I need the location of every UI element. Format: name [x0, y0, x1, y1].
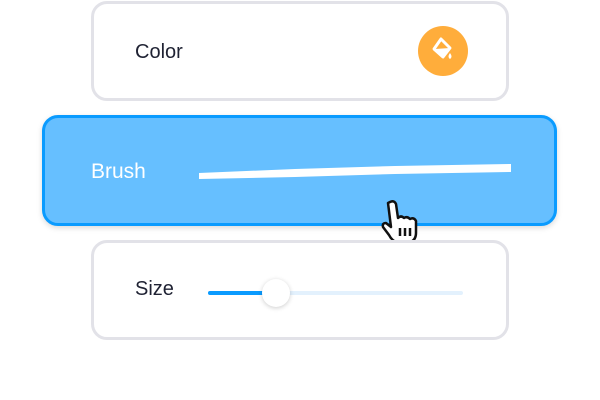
slider — [208, 278, 463, 310]
icon: hand cursor — [382, 200, 418, 240]
brush stroke — [199, 164, 511, 179]
label: Brush: Brush — [91, 160, 146, 183]
label: Color: Color — [135, 41, 183, 63]
panel: color — [91, 1, 509, 101]
panel: brush — [42, 115, 557, 226]
panel: size — [91, 240, 509, 340]
icon: paint bucket — [418, 26, 468, 76]
label: Size: Size — [135, 278, 174, 300]
